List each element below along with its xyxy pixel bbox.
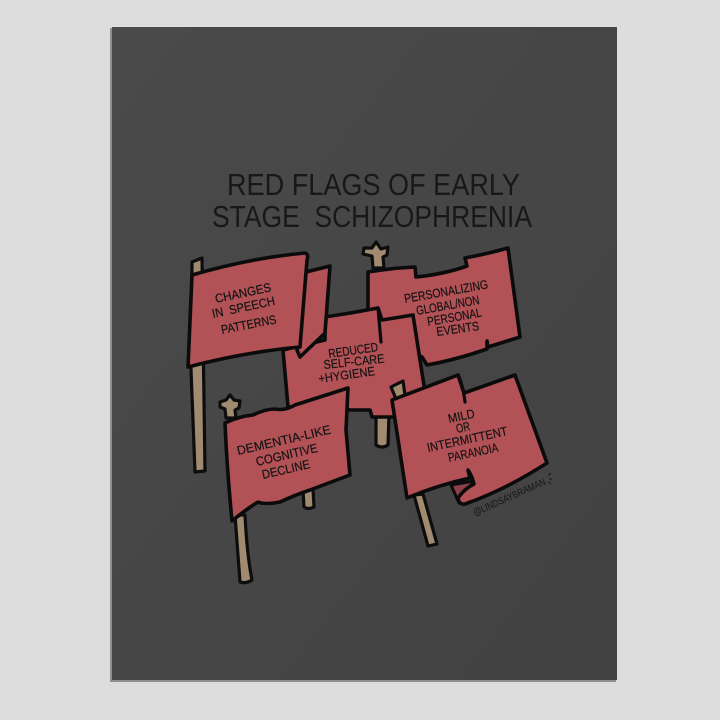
label: personalizing: PERSONAL (426, 306, 483, 329)
label: reduced: SELF-CARE (323, 352, 385, 372)
label: mild: OR (455, 419, 471, 436)
title (212, 167, 532, 234)
label: personalizing: PERSONALIZING (403, 277, 489, 306)
label: reduced (317, 340, 385, 386)
underside fold: mild (451, 481, 474, 503)
flag cloth: mild (392, 375, 547, 504)
flag: reduced self-care + hygiene (283, 308, 425, 447)
flag pole: mild (414, 494, 437, 546)
flag: dementia-like cognitive decline (220, 388, 350, 583)
label: dementia (236, 423, 332, 482)
label: changes (211, 280, 278, 337)
label: personalizing (403, 277, 489, 339)
label: mild: PARANOIA (447, 441, 500, 465)
flag cloth: changes (188, 253, 308, 367)
label: reduced: +HYGIENE (317, 364, 376, 386)
label: changes: PATTERNS (220, 313, 278, 337)
label: mild: INTERMITTENT (426, 424, 509, 455)
label: changes: CHANGES (214, 280, 272, 306)
flag pole top: personalizing (363, 242, 388, 268)
label: mild (426, 407, 509, 465)
flag pole top: reduced (391, 381, 405, 399)
title: STAGE SCHIZOPHRENIA (212, 199, 532, 234)
label: dementia: DECLINE (261, 457, 311, 482)
flag tail: changes (297, 266, 330, 357)
label: dementia: DEMENTIA-LIKE (236, 423, 332, 458)
fold line: reduced (378, 308, 381, 342)
label: personalizing: GLOBAL/NON (415, 293, 481, 318)
label: changes: IN SPEECH (211, 294, 276, 321)
flag pole: dementia (235, 515, 252, 583)
title: RED FLAGS OF EARLY (227, 167, 520, 202)
label: dementia: COGNITIVE (255, 441, 319, 469)
flag pole top: dementia (220, 395, 240, 418)
flag pole: reduced, lower (376, 415, 389, 447)
fold line: mild (458, 375, 465, 402)
flag cloth: personalizing (368, 248, 520, 365)
flag pole: changes (191, 258, 205, 472)
artist credit: @LINDSAYBRAMAN (472, 477, 547, 519)
label: personalizing: EVENTS (435, 319, 480, 339)
label: mild: MILD (447, 407, 476, 426)
flag cloth: reduced (283, 308, 425, 417)
flag cloth: dementia (225, 388, 350, 521)
flag pole stub: dementia (303, 488, 314, 508)
flag: mild or intermittent paranoia (392, 375, 547, 546)
flag: changes in speech patterns (188, 253, 330, 472)
label: reduced: REDUCED (327, 340, 379, 361)
flag: personalizing global/non personal events (363, 242, 520, 365)
poster sheet (110, 27, 617, 682)
